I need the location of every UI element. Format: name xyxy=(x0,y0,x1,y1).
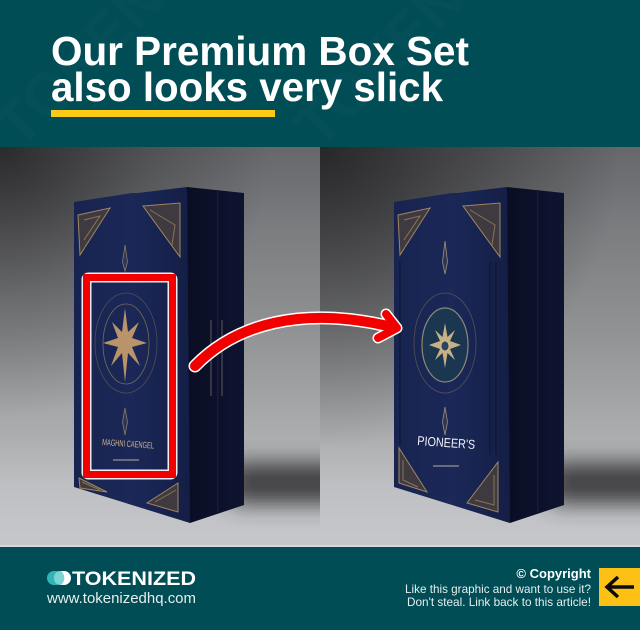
lower needle xyxy=(122,408,128,435)
logo wordmark: TOKENIZED xyxy=(72,569,196,590)
logo icon xyxy=(47,571,71,585)
panel: after photo background xyxy=(320,147,640,547)
title xyxy=(51,28,469,110)
copyright heading: © Copyright xyxy=(516,566,592,581)
website url: www.tokenizedhq.com xyxy=(46,590,196,607)
title: also looks very slick xyxy=(51,64,443,110)
box side face xyxy=(187,187,244,523)
upper needle xyxy=(122,245,128,271)
box side seam xyxy=(217,190,218,512)
gold corner ornaments xyxy=(398,203,500,512)
arrow: from before to after xyxy=(195,314,397,366)
lower needle xyxy=(442,407,448,435)
copyright note: Don't steal. Link back to this article! xyxy=(407,595,591,609)
box front face xyxy=(74,187,190,523)
footer band xyxy=(0,547,640,630)
title underline xyxy=(51,110,275,117)
front panel rails xyxy=(400,262,496,455)
compass emblem xyxy=(95,293,157,393)
compass emblem xyxy=(414,293,476,393)
box side markings xyxy=(210,320,223,396)
title: Our Premium Box Set xyxy=(51,28,469,74)
copyright note: Like this graphic and want to use it? xyxy=(405,582,591,596)
box side face xyxy=(507,187,564,523)
highlight rectangle xyxy=(86,278,172,474)
box label text: PIONEER'S xyxy=(417,433,476,452)
upper needle xyxy=(442,241,448,274)
box front face xyxy=(394,187,510,523)
gold corner ornaments xyxy=(78,203,180,512)
logo xyxy=(47,569,196,590)
box: after design xyxy=(394,187,564,523)
box: before design xyxy=(74,187,244,523)
box label text: MAGHNI CAENGEL xyxy=(102,437,154,451)
box small print xyxy=(433,465,459,467)
copyright note xyxy=(405,582,591,609)
header band xyxy=(0,0,640,159)
panel: before photo background xyxy=(0,147,350,547)
box small print xyxy=(113,459,139,461)
box side seam xyxy=(537,190,538,512)
yellow arrow button xyxy=(599,568,640,606)
